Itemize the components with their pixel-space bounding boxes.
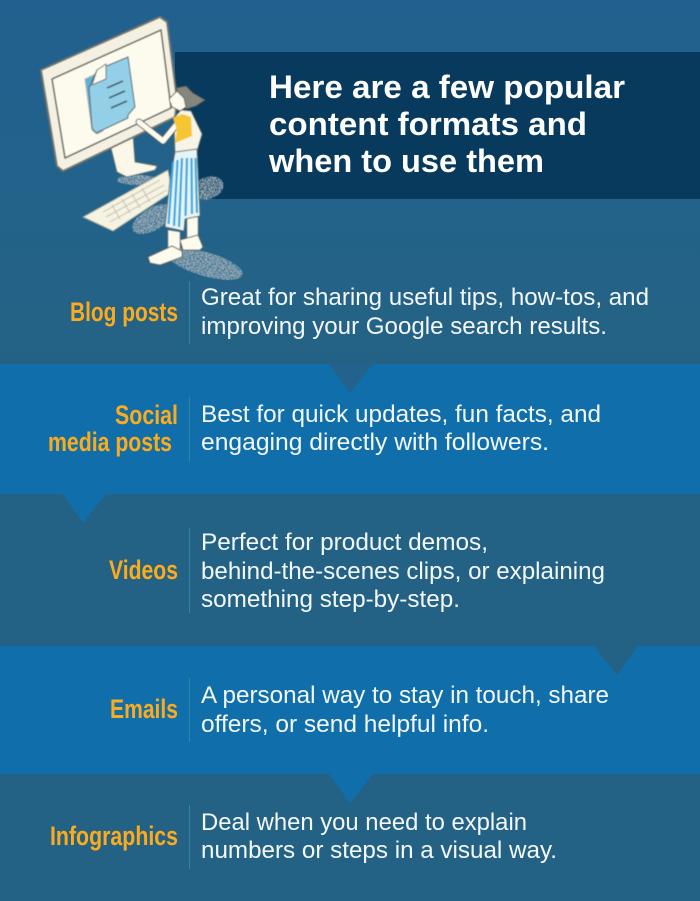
description: videos: Perfect for product demos, (201, 529, 488, 556)
description: videos: behind-the-scenes clips, or explaining (201, 558, 605, 585)
title (268, 69, 625, 179)
description: blog posts: Great for sharing useful tips, how-tos, and (201, 284, 649, 311)
right shoe (180, 235, 203, 250)
band: emails (0, 646, 700, 803)
monitor stand (111, 135, 157, 177)
arm (139, 122, 177, 141)
description: infographics: numbers or steps in a visual way. (201, 837, 557, 864)
label: social media posts: Social (115, 400, 178, 430)
description: infographics (201, 809, 557, 864)
label: infographics: Infographics (50, 821, 178, 851)
document icon (85, 57, 135, 134)
title banner (175, 52, 700, 199)
right sock (187, 217, 198, 238)
label: social media posts: media posts (48, 427, 172, 457)
hair (176, 86, 205, 109)
illustration: person at a computer (41, 17, 246, 286)
torso (174, 110, 202, 153)
label: emails: Emails (110, 694, 178, 724)
title: content formats and (269, 106, 587, 142)
left shoe (148, 246, 182, 265)
description: social media posts: engaging directly with followers. (201, 429, 549, 456)
description: social media posts: Best for quick updates, fun facts, and (201, 401, 601, 428)
pants (165, 149, 200, 231)
label: blog posts: Blog posts (70, 297, 178, 327)
description: social media posts (201, 401, 601, 456)
band: blog posts (70, 281, 649, 344)
label: social media posts (48, 400, 178, 457)
left sock (168, 230, 180, 250)
monitor (41, 17, 177, 171)
head (169, 91, 186, 111)
band: videos (0, 494, 700, 675)
description: videos: something step-by-step. (201, 586, 460, 613)
pant stripes (168, 158, 197, 227)
band: infographics (0, 774, 700, 901)
label: videos: Videos (109, 555, 178, 585)
shadows under the figure (117, 172, 246, 286)
person (139, 86, 205, 265)
description: blog posts (201, 284, 649, 340)
title: when to use them (268, 143, 544, 179)
band: social media posts (0, 364, 700, 523)
background: top section (0, 0, 700, 365)
description: emails: A personal way to stay in touch, share (201, 682, 609, 709)
yellow top (173, 114, 192, 143)
description: videos (201, 529, 605, 613)
description: infographics: Deal when you need to explain (201, 809, 527, 836)
description: emails: offers, or send helpful info. (201, 711, 489, 738)
description: emails (201, 682, 609, 738)
title: Here are a few popular (269, 69, 625, 105)
description: blog posts: improving your Google search results. (201, 313, 607, 340)
keyboard (83, 170, 172, 231)
